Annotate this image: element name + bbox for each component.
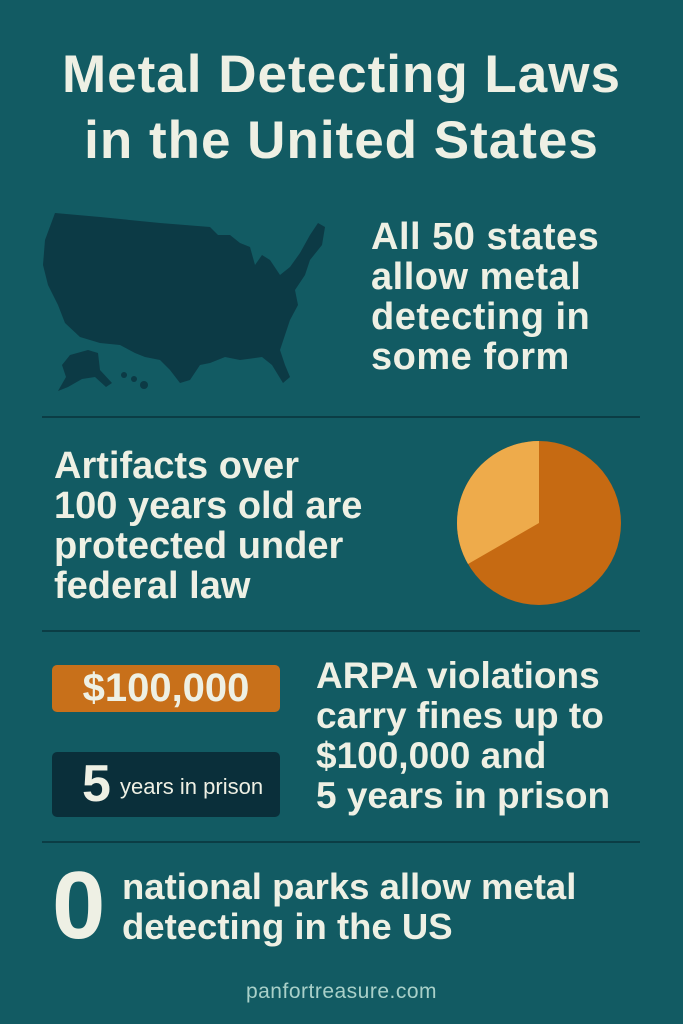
text: artifacts: Artifacts over xyxy=(54,445,299,487)
big zero: 0 xyxy=(52,852,105,959)
text: all 50 states: some form xyxy=(371,336,570,378)
text: ARPA: $100,000 and xyxy=(316,735,546,776)
text: national parks: national parks allow metal xyxy=(122,866,576,907)
badge: prison xyxy=(52,752,280,817)
text: artifacts xyxy=(54,445,362,607)
text: national parks xyxy=(122,866,576,947)
text: all 50 states: allow metal xyxy=(371,256,581,298)
text: ARPA: 5 years in prison xyxy=(316,775,610,816)
text: all 50 states: All 50 states xyxy=(371,216,599,258)
text: all 50 states: detecting in xyxy=(371,296,590,338)
text: ARPA: carry fines up to xyxy=(316,695,604,736)
text: artifacts: federal law xyxy=(54,565,250,607)
pie chart xyxy=(457,441,621,605)
text: all 50 states xyxy=(371,216,599,378)
badge: fine xyxy=(52,665,280,712)
footer: panfortreasure.com xyxy=(246,980,437,1003)
text: artifacts: 100 years old are xyxy=(54,485,362,527)
title: in the United States xyxy=(84,111,599,170)
text: ARPA: ARPA violations xyxy=(316,655,600,696)
text: artifacts: protected under xyxy=(54,525,343,567)
title xyxy=(62,45,621,170)
icon: US map xyxy=(43,213,325,391)
badge: prison: 5 xyxy=(82,755,111,813)
title: Metal Detecting Laws xyxy=(62,45,621,104)
badge: fine: $100,000 xyxy=(83,666,249,710)
badge: prison: years in prison xyxy=(120,774,263,799)
text: ARPA xyxy=(316,655,610,816)
text: national parks: detecting in the US xyxy=(122,906,453,947)
